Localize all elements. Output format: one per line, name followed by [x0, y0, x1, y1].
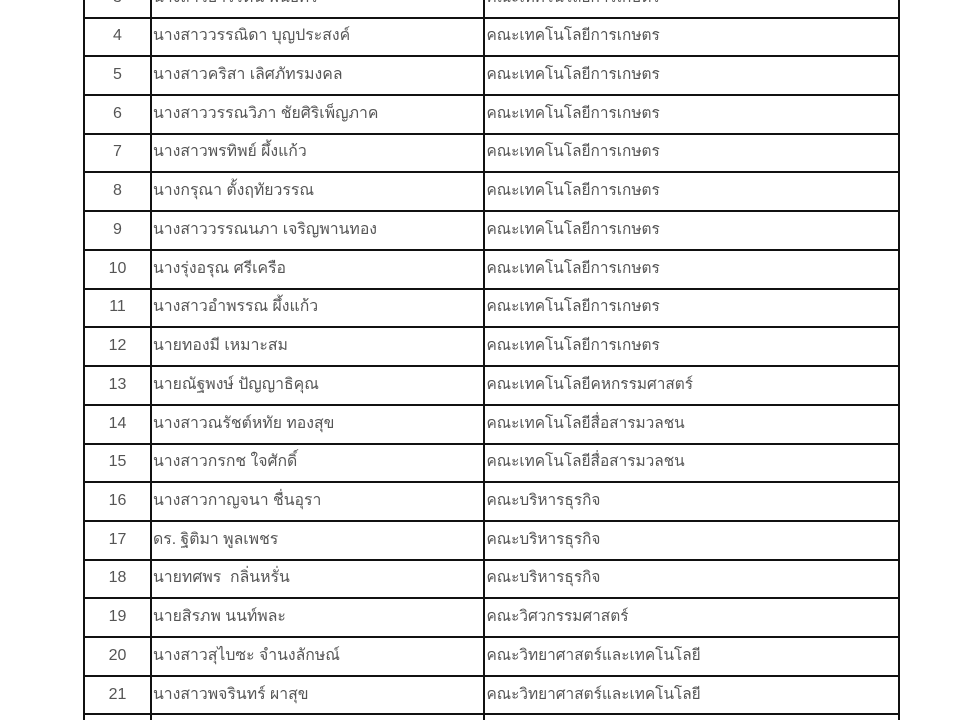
row 12: [109, 336, 660, 354]
row 13: [109, 375, 693, 394]
row 13: นายณัฐพงษ์ ปัญญาธิคุณ: [153, 376, 319, 393]
row 5: คณะเทคโนโลยีการเกษตร: [486, 66, 660, 83]
row 9: [113, 220, 660, 238]
row 14: คณะเทคโนโลยีสื่อสารมวลชน: [486, 414, 685, 432]
row 4: นางสาววรรณิดา บุญประสงค์: [153, 27, 350, 44]
row 15: 15: [109, 453, 126, 470]
row 9: คณะเทคโนโลยีการเกษตร: [486, 221, 660, 238]
row 6: คณะเทคโนโลยีการเกษตร: [486, 105, 660, 122]
row 6: 6: [113, 105, 122, 122]
row 16: คณะบริหารธุรกิจ: [486, 492, 600, 509]
row 15: [109, 449, 685, 470]
row 20: [109, 646, 701, 664]
row 15: คณะเทคโนโลยีสื่อสารมวลชน: [486, 453, 685, 470]
row 20: นางสาวสุไบซะ จำนงลักษณ์: [153, 647, 340, 664]
row 16: นางสาวกาญจนา ชื่นอุรา: [153, 492, 321, 509]
row 8: นางกรุณา ตั้งฤทัยวรรณ: [153, 182, 314, 199]
row 19: 19: [109, 608, 126, 625]
row 14: นางสาวณรัชต์หทัย ทองสุข: [153, 414, 334, 432]
row 11: 11: [109, 298, 126, 315]
row 21: นางสาวพจรินทร์ ผาสุข: [153, 686, 309, 702]
row 20: 20: [109, 647, 126, 664]
row 8: 8: [113, 182, 122, 199]
row 7: นางสาวพรทิพย์ ผึ้งแก้ว: [153, 143, 307, 160]
row 9: นางสาววรรณนภา เจริญพานทอง: [153, 221, 377, 238]
row 8: คณะเทคโนโลยีการเกษตร: [486, 182, 660, 199]
row 18: [109, 566, 600, 586]
row 17: คณะบริหารธุรกิจ: [486, 531, 600, 548]
row 10: [109, 259, 660, 278]
row 6: นางสาววรรณวิภา ชัยศิริเพ็ญภาค: [153, 105, 378, 122]
row 17: ดร. ฐิติมา พูลเพชร: [153, 531, 278, 548]
row 16: 16: [109, 492, 126, 509]
row 16: [109, 488, 600, 510]
row 11: คณะเทคโนโลยีการเกษตร: [486, 298, 660, 315]
row 20: คณะวิทยาศาสตร์และเทคโนโลยี: [486, 647, 701, 664]
row 7: 7: [113, 143, 122, 160]
row 4: [113, 26, 660, 44]
row 14: 14: [109, 414, 126, 432]
row 10: นางรุ่งอรุณ ศรีเครือ: [153, 260, 286, 277]
row 19: [109, 607, 628, 625]
row 18: นายทศพร กลิ่นหรั่น: [153, 569, 290, 586]
row 18: 18: [109, 569, 126, 586]
row 12: 12: [109, 337, 126, 354]
row 10: 10: [109, 260, 126, 277]
row 8: [113, 178, 660, 200]
row 15: นางสาวกรกช ใจศักดิ์: [153, 453, 297, 470]
row 9: 9: [113, 221, 122, 238]
row 5: 5: [113, 66, 122, 83]
row 12: คณะเทคโนโลยีการเกษตร: [486, 337, 660, 354]
row 4: คณะเทคโนโลยีการเกษตร: [486, 27, 660, 44]
row 12: นายทองมี เหมาะสม: [153, 337, 288, 354]
row 5: นางสาวคริสา เลิศภัทรมงคล: [153, 66, 343, 83]
row 21: [109, 685, 701, 704]
row 17: [109, 531, 600, 548]
row 21: 21: [109, 686, 126, 702]
row 11: นางสาวอำพรรณ ผึ้งแก้ว: [153, 298, 318, 315]
row 6: [113, 103, 660, 122]
row 4: 4: [113, 27, 122, 44]
row 21: คณะวิทยาศาสตร์และเทคโนโลยี: [486, 686, 701, 702]
row 13: คณะเทคโนโลยีคหกรรมศาสตร์: [486, 376, 693, 393]
row 14: [109, 412, 685, 432]
row 10: คณะเทคโนโลยีการเกษตร: [486, 260, 660, 277]
row 7: [113, 140, 660, 160]
row 18: คณะบริหารธุรกิจ: [486, 569, 600, 586]
row 19: คณะวิศวกรรมศาสตร์: [486, 608, 628, 625]
row 17: 17: [109, 531, 126, 548]
row 3: [113, 0, 660, 6]
row 7: คณะเทคโนโลยีการเกษตร: [486, 143, 660, 160]
row 19: นายสิรภพ นนท์พละ: [153, 608, 286, 625]
row 5: [113, 65, 660, 83]
row 13: 13: [109, 376, 126, 393]
row 11: [109, 294, 660, 315]
